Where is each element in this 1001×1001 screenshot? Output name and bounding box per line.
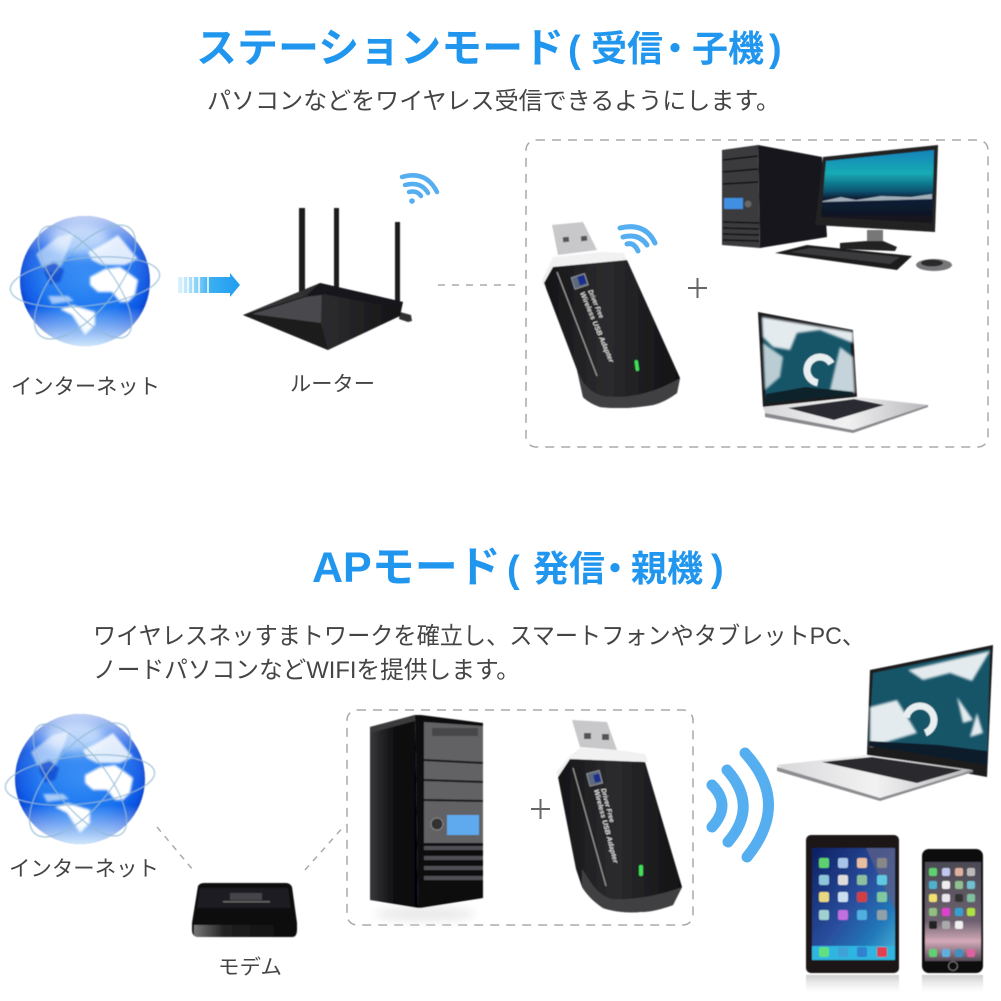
connector: modem to panel — [305, 825, 345, 870]
icon: USB adapter — [556, 720, 682, 912]
title: AP mode: APモード — [312, 544, 501, 592]
icon: modem — [192, 883, 297, 937]
title: AP mode: ) — [711, 548, 724, 590]
title: station mode: ( — [568, 29, 581, 71]
arrow: internet to router — [178, 273, 240, 297]
title: AP mode: 親機 — [631, 548, 703, 589]
label: router: ルーター — [290, 373, 375, 396]
title: station mode: 子機 — [692, 28, 764, 69]
image: desktop computer — [722, 145, 952, 271]
description line 1: ワイヤレスネッすまトワークを確立し、スマートフォンやタブレットPC、 — [93, 623, 865, 650]
subtitle: station mode description: パソコンなどをワイヤレス受信できるようにします。 — [207, 88, 780, 115]
image: smartphone — [922, 849, 983, 993]
label: internet (station): インターネット — [11, 375, 160, 399]
panel: AP devices — [347, 710, 693, 925]
icon: adapter wifi — [620, 227, 655, 251]
adapter print (AP): Driver Free — [599, 788, 615, 823]
image: laptop (AP) — [777, 645, 993, 801]
title: AP mode: ・ — [597, 548, 633, 589]
icon: plus — [688, 278, 707, 298]
title: station mode: ) — [769, 28, 782, 70]
title: AP mode: 発信 — [533, 548, 605, 589]
label: modem: モデム — [218, 956, 282, 979]
image: desktop tower — [370, 715, 483, 921]
adapter print (station): Driver Free — [586, 289, 604, 319]
description line 2: ノードパソコンなどWIFIを提供します。 — [93, 657, 520, 684]
icon: plus — [531, 799, 550, 819]
title: station mode: ステーションモード — [196, 25, 564, 71]
title: station mode: 受信 — [591, 28, 663, 69]
connector: internet to modem — [157, 827, 193, 870]
panel: station devices — [526, 140, 988, 447]
icon: internet globe (AP) — [3, 707, 157, 853]
title: AP mode: ( — [507, 549, 520, 591]
icon: AP wifi waves — [712, 753, 769, 857]
label: internet (AP): インターネット — [9, 857, 159, 881]
icon: internet globe (station) — [8, 209, 162, 355]
image: laptop — [758, 312, 928, 433]
adapter print line 2 (station): Wireless USB Adapter — [578, 291, 615, 365]
title: station mode: ・ — [657, 28, 693, 69]
image: tablet — [806, 835, 899, 993]
adapter print line 2 (AP): Wireless USB Adapter — [592, 789, 619, 865]
icon: USB adapter — [542, 222, 680, 408]
icon: router wifi — [402, 175, 437, 204]
connector: router to panel — [438, 284, 516, 286]
icon: router — [243, 208, 412, 350]
